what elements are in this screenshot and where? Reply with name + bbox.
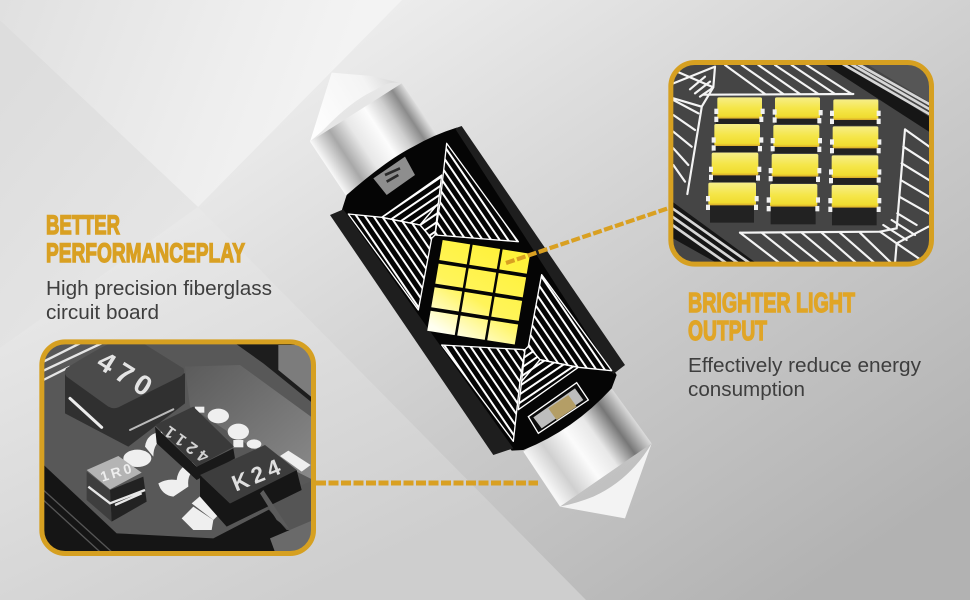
solder pads bbox=[123, 407, 311, 530]
resistor 1R0: 1R0 bbox=[98, 460, 134, 485]
bottom metal cap bbox=[523, 388, 652, 518]
top right rail bbox=[826, 65, 929, 132]
small chip near top cap bbox=[373, 157, 415, 195]
text: high precision fiberglass circuit board: circuit board bbox=[46, 302, 159, 324]
text: effectively reduce energy consumption bbox=[688, 355, 921, 401]
LED chips close-up bbox=[706, 97, 881, 225]
bottom left rail bbox=[673, 202, 754, 262]
heading: better performance play bbox=[46, 210, 245, 268]
panel: circuit close-up bbox=[39, 339, 316, 557]
bottom web trace pattern bbox=[442, 275, 612, 441]
trace hatching bbox=[673, 65, 932, 265]
board shadow and edges bbox=[42, 342, 315, 557]
dashed connector to LED close-up bbox=[506, 208, 669, 263]
gold frame bbox=[671, 62, 931, 264]
gold frame bbox=[42, 342, 313, 553]
12 LED chip array bbox=[427, 240, 530, 345]
chip K24: K24 bbox=[228, 453, 284, 496]
text: high precision fiberglass circuit board bbox=[46, 278, 272, 324]
chip 4211: 4211 bbox=[161, 422, 212, 467]
text: effectively reduce energy consumption: Effectively reduce energy bbox=[688, 355, 921, 377]
heading: brighter light output: BRIGHTER LIGHT bbox=[688, 287, 855, 318]
chip K24 bbox=[200, 445, 302, 530]
heading: better performance play: PERFORMANCEPLAY bbox=[46, 238, 245, 268]
top metal cap bbox=[310, 73, 440, 197]
inductor 470 bbox=[65, 343, 185, 447]
heading: brighter light output: OUTPUT bbox=[688, 315, 767, 346]
chip 4211 bbox=[155, 407, 235, 480]
small resistor near bottom cap bbox=[528, 383, 588, 433]
panel: LED close-up bbox=[668, 60, 937, 267]
text: effectively reduce energy consumption: consumption bbox=[688, 379, 805, 401]
black circuit board body bbox=[330, 126, 625, 455]
heading: better performance play: BETTER bbox=[46, 210, 120, 240]
dashed connector to circuit close-up bbox=[316, 480, 538, 486]
stripes top left bbox=[43, 343, 102, 380]
LED festoon bulb bbox=[310, 73, 652, 518]
top web trace pattern bbox=[348, 143, 518, 310]
heading: brighter light output bbox=[688, 287, 855, 346]
resistor 1R0 bbox=[87, 456, 147, 522]
inductor 470: 470 bbox=[92, 345, 158, 402]
text: high precision fiberglass circuit board: High precision fiberglass bbox=[46, 278, 272, 300]
